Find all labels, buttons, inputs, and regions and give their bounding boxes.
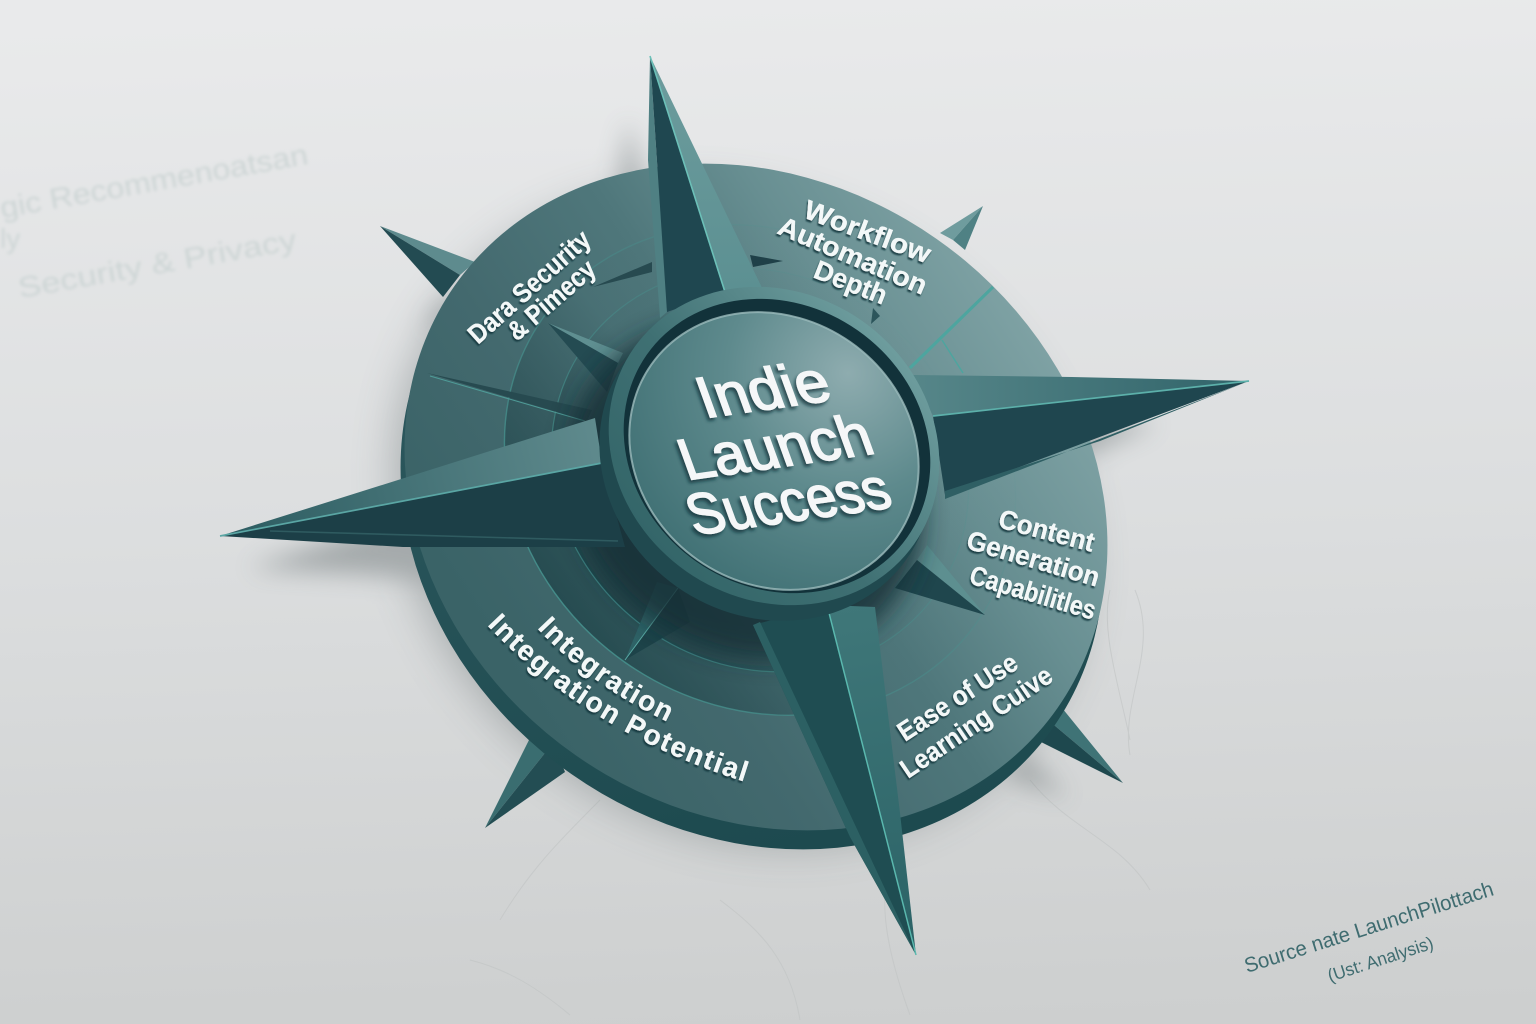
segment slits — [427, 255, 993, 421]
text block: Integration Potential: Integration Potential — [487, 612, 749, 784]
text block: Data Security and Privacy: Dara Security — [462, 224, 596, 349]
faded background text: gic Recommenoatsan — [0, 139, 310, 225]
bottom point — [753, 605, 916, 955]
inner dial rings — [408, 126, 1112, 814]
disc face — [274, 28, 1238, 966]
text block: Data Security and Privacy: & Pimecy — [501, 254, 602, 347]
icon: SE small point — [1033, 703, 1123, 783]
source note: Source nate LaunchPilottach — [1242, 878, 1496, 978]
inner small points — [548, 323, 985, 660]
text block: Workflow Automation Depth: Workflow — [800, 195, 936, 270]
text block: Content Generation Capabilities: Capabilitles — [966, 560, 1099, 625]
icon: SW small point — [485, 738, 565, 828]
text block: Workflow Automation Depth: Automation — [774, 211, 932, 301]
outer small points — [380, 206, 1123, 828]
icon: NW small point — [380, 226, 475, 297]
faded background text: ly — [0, 223, 20, 254]
left point — [220, 418, 625, 547]
hub groove — [566, 239, 988, 653]
text block: Workflow Automation Depth: Depth — [810, 255, 892, 310]
faded background text — [0, 139, 310, 305]
source note: (Ust: Analysis) — [1325, 933, 1436, 986]
text block: Workflow Automation Depth — [774, 195, 936, 310]
text block: Content Generation Capabilities — [963, 504, 1103, 625]
right point — [913, 375, 1249, 499]
hub extrusion — [536, 234, 996, 686]
text block: Content Generation Capabilities: Content — [995, 504, 1098, 558]
text block: Ease of Use Learning Curve: Ease of Use — [892, 647, 1023, 747]
icon: inner NW point — [548, 323, 623, 392]
text block: Ease of Use Learning Curve: Learning Cuive — [895, 660, 1058, 784]
top point — [648, 56, 764, 318]
cast shadow — [248, 58, 1212, 976]
disc edge — [270, 47, 1234, 985]
hub cast shade — [501, 252, 989, 728]
title — [669, 349, 899, 547]
hub lens — [575, 256, 973, 646]
hub rim — [546, 223, 1002, 669]
icon: main compass points — [220, 56, 1249, 955]
icon: inner SE point — [895, 545, 985, 615]
icon: NE small point — [940, 206, 983, 250]
panel: compass disc — [270, 28, 1238, 985]
text block: Integration Potential: Integration — [537, 616, 672, 724]
title: Indie — [687, 349, 839, 430]
faded background text: Security & Privacy — [16, 224, 300, 305]
text block: Content Generation Capabilities: Generation — [963, 525, 1103, 592]
icon: inner SW point — [625, 582, 690, 660]
panel: central hub — [536, 223, 1002, 686]
title: Launch — [669, 402, 882, 492]
title: Success — [677, 456, 899, 547]
